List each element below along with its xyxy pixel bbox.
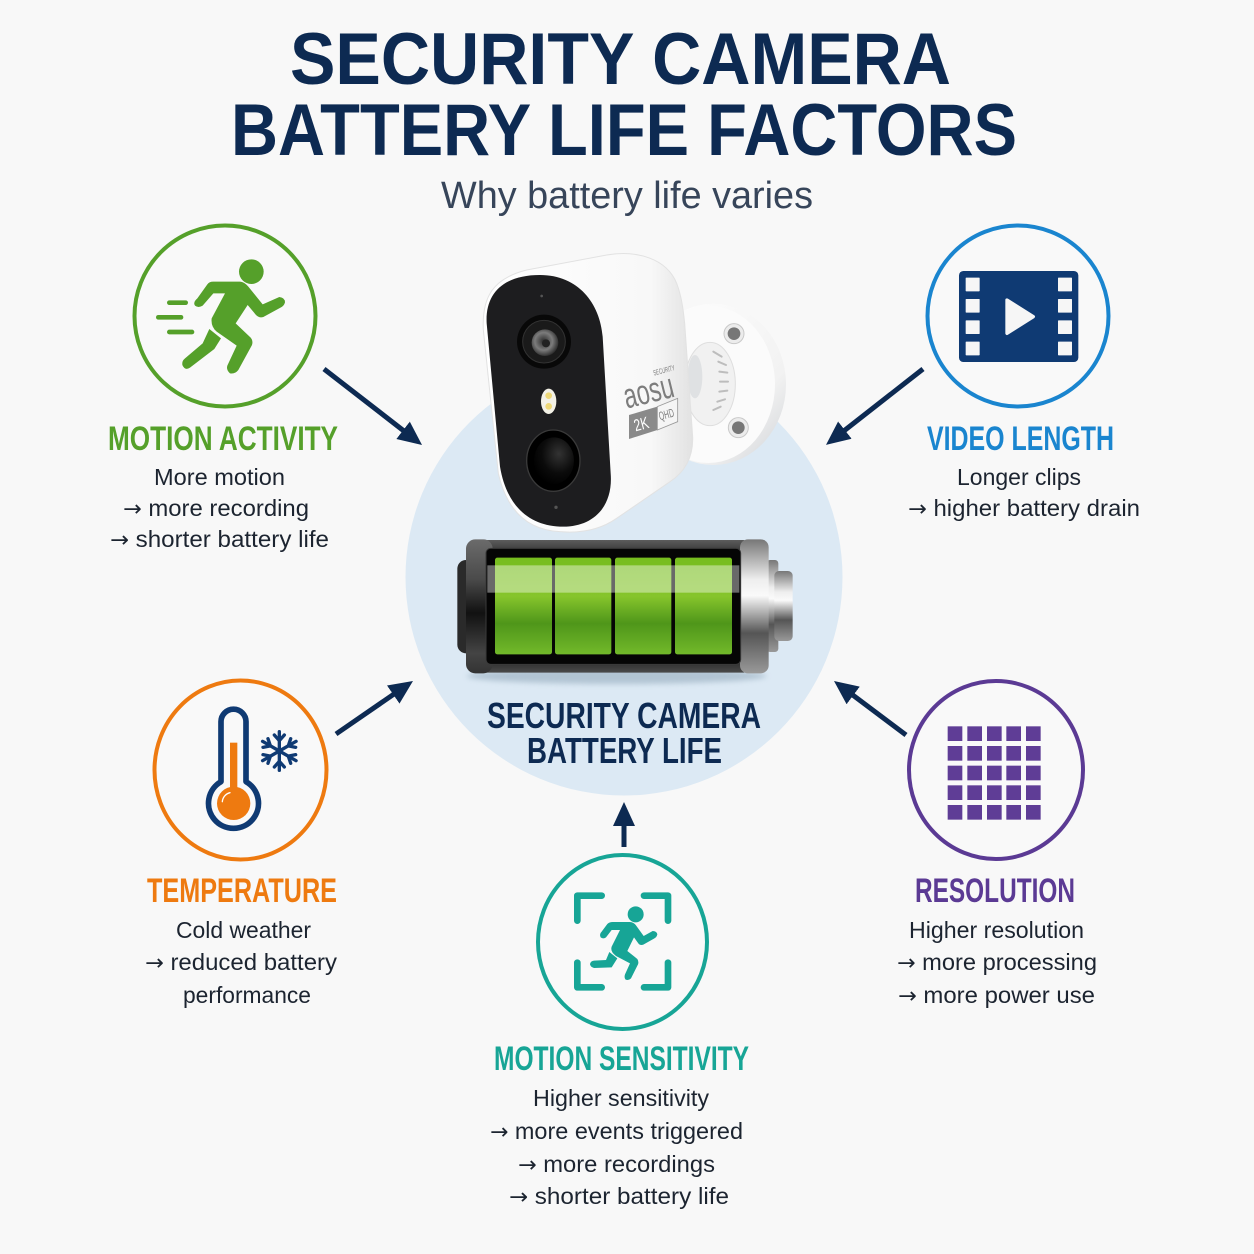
panel: temperature xyxy=(145,680,337,1008)
icon: film strip with play button xyxy=(928,226,1108,406)
icon: thermometer and snowflake xyxy=(154,680,326,860)
camera branding xyxy=(619,363,678,439)
icon: snowflake xyxy=(260,732,299,770)
icon: pixel grid xyxy=(909,681,1083,859)
arrow: temperature to center xyxy=(336,686,406,734)
description: temperature xyxy=(145,917,337,1008)
heading: motion activity: MOTION ACTIVITY xyxy=(108,420,338,458)
description: temperature: performance xyxy=(183,982,311,1008)
central label xyxy=(487,695,761,771)
arrow: video length to center xyxy=(832,369,923,440)
heading: video length: VIDEO LENGTH xyxy=(927,420,1114,458)
charge cells xyxy=(495,558,732,654)
arrow: motion activity to center xyxy=(324,369,416,440)
description: temperature: → reduced battery xyxy=(145,949,337,976)
title: SECURITY CAMERA xyxy=(290,19,951,100)
wall mount xyxy=(641,304,786,465)
subtitle: Why battery life varies xyxy=(441,175,813,217)
description: motion sensitivity: → more events triggered xyxy=(490,1118,743,1145)
central label: SECURITY CAMERA xyxy=(487,695,761,736)
camera illustration xyxy=(483,254,786,532)
description: motion activity xyxy=(110,464,329,553)
camera branding: aosu xyxy=(619,366,678,416)
arrow: resolution to center xyxy=(840,686,906,735)
description: motion activity: → more recording xyxy=(123,495,309,522)
icon: person in detection frame xyxy=(538,855,707,1029)
panel: motion sensitivity xyxy=(490,855,749,1210)
panel: resolution xyxy=(897,681,1097,1009)
description: temperature: Cold weather xyxy=(176,917,311,943)
description: resolution: Higher resolution xyxy=(909,917,1084,943)
description: video length: → higher battery drain xyxy=(908,495,1140,522)
icon: running person xyxy=(134,226,316,406)
panel: motion activity xyxy=(108,226,338,553)
camera branding: SECURITY xyxy=(652,363,676,378)
title xyxy=(231,19,1017,171)
panel: video length xyxy=(908,226,1140,522)
arrow: motion sensitivity to center xyxy=(622,810,626,847)
black camera face xyxy=(487,275,611,527)
battery illustration xyxy=(457,539,793,684)
description: video length: Longer clips xyxy=(957,464,1081,490)
central circle background xyxy=(406,358,842,796)
description: motion sensitivity: Higher sensitivity xyxy=(533,1085,709,1111)
camera branding: 2K xyxy=(632,413,651,435)
LED light xyxy=(541,389,556,414)
description: resolution: → more power use xyxy=(898,982,1095,1009)
description: motion sensitivity: → shorter battery life xyxy=(509,1183,729,1210)
description: motion sensitivity xyxy=(490,1085,743,1210)
heading: motion sensitivity: MOTION SENSITIVITY xyxy=(494,1040,749,1078)
description: video length xyxy=(908,464,1140,522)
description: resolution: → more processing xyxy=(897,949,1097,976)
title: BATTERY LIFE FACTORS xyxy=(231,90,1017,171)
description: motion activity: → shorter battery life xyxy=(110,526,329,553)
motion sensor xyxy=(527,430,580,491)
camera body xyxy=(483,254,693,532)
heading: resolution: RESOLUTION xyxy=(915,872,1075,910)
heading: temperature: TEMPERATURE xyxy=(147,872,337,910)
description: motion sensitivity: → more recordings xyxy=(518,1151,715,1178)
camera branding: QHD xyxy=(657,406,676,423)
central label: BATTERY LIFE xyxy=(527,730,722,771)
main lens xyxy=(517,315,571,369)
description: motion activity: More motion xyxy=(154,464,285,490)
description: resolution xyxy=(897,917,1097,1009)
